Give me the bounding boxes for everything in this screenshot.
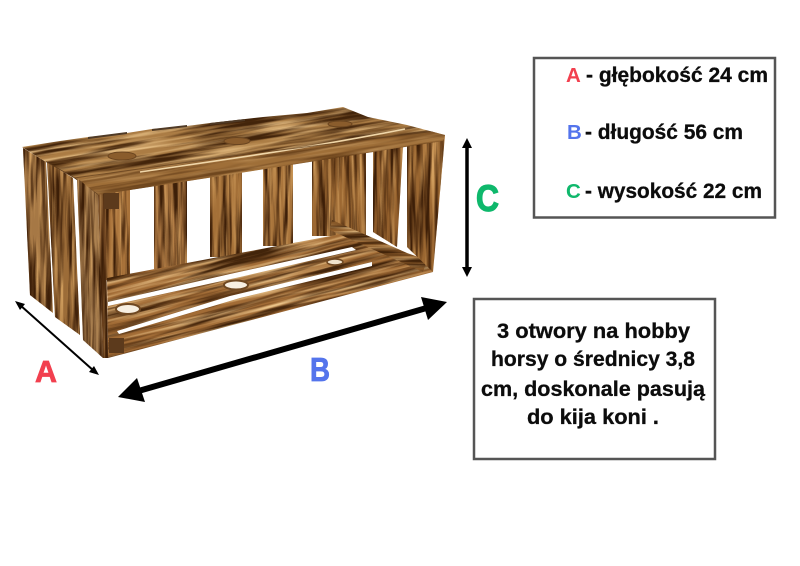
label A: A bbox=[35, 354, 57, 389]
legend line C: - wysokość 22 cm bbox=[585, 180, 762, 203]
front left post bbox=[77, 178, 108, 358]
panel: note on holes bbox=[474, 299, 715, 459]
hole in floor, right bbox=[327, 259, 343, 265]
end grain block bottom bbox=[109, 338, 124, 353]
legend line C: C bbox=[566, 180, 581, 203]
dimension arrow C bbox=[462, 138, 472, 277]
legend line A: - głębokość 24 cm bbox=[586, 64, 768, 87]
right inner slat bbox=[330, 220, 427, 272]
left end slats bbox=[23, 148, 80, 335]
legend line B: B bbox=[567, 121, 582, 144]
back slats bbox=[103, 146, 403, 280]
floor gap, front bbox=[117, 262, 372, 334]
hole in floor, middle bbox=[224, 280, 248, 290]
hole in floor, left bbox=[116, 304, 140, 314]
floor boards bbox=[107, 234, 433, 358]
wooden crate photo bbox=[22, 107, 445, 358]
note text: cm, doskonale pasują bbox=[481, 378, 705, 401]
legend line A: A bbox=[566, 64, 581, 87]
note text bbox=[481, 320, 705, 429]
label C: C bbox=[476, 178, 499, 219]
crate top boards bbox=[22, 107, 445, 195]
holes in top board bbox=[108, 121, 352, 160]
note text: 3 otwory na hobby bbox=[497, 320, 690, 343]
legend line B: - długość 56 cm bbox=[585, 121, 743, 144]
dimension arrow B bbox=[118, 297, 447, 402]
note text: horsy o średnicy 3,8 bbox=[491, 348, 695, 371]
right front post bbox=[407, 135, 445, 272]
floor gap, rear bbox=[108, 247, 356, 306]
dimension arrow A bbox=[15, 301, 99, 375]
label B: B bbox=[310, 351, 330, 388]
panel: dimensions legend bbox=[534, 58, 775, 218]
top back notches bbox=[88, 119, 245, 139]
note text: do kija koni . bbox=[527, 406, 659, 429]
end grain block top bbox=[104, 193, 119, 209]
